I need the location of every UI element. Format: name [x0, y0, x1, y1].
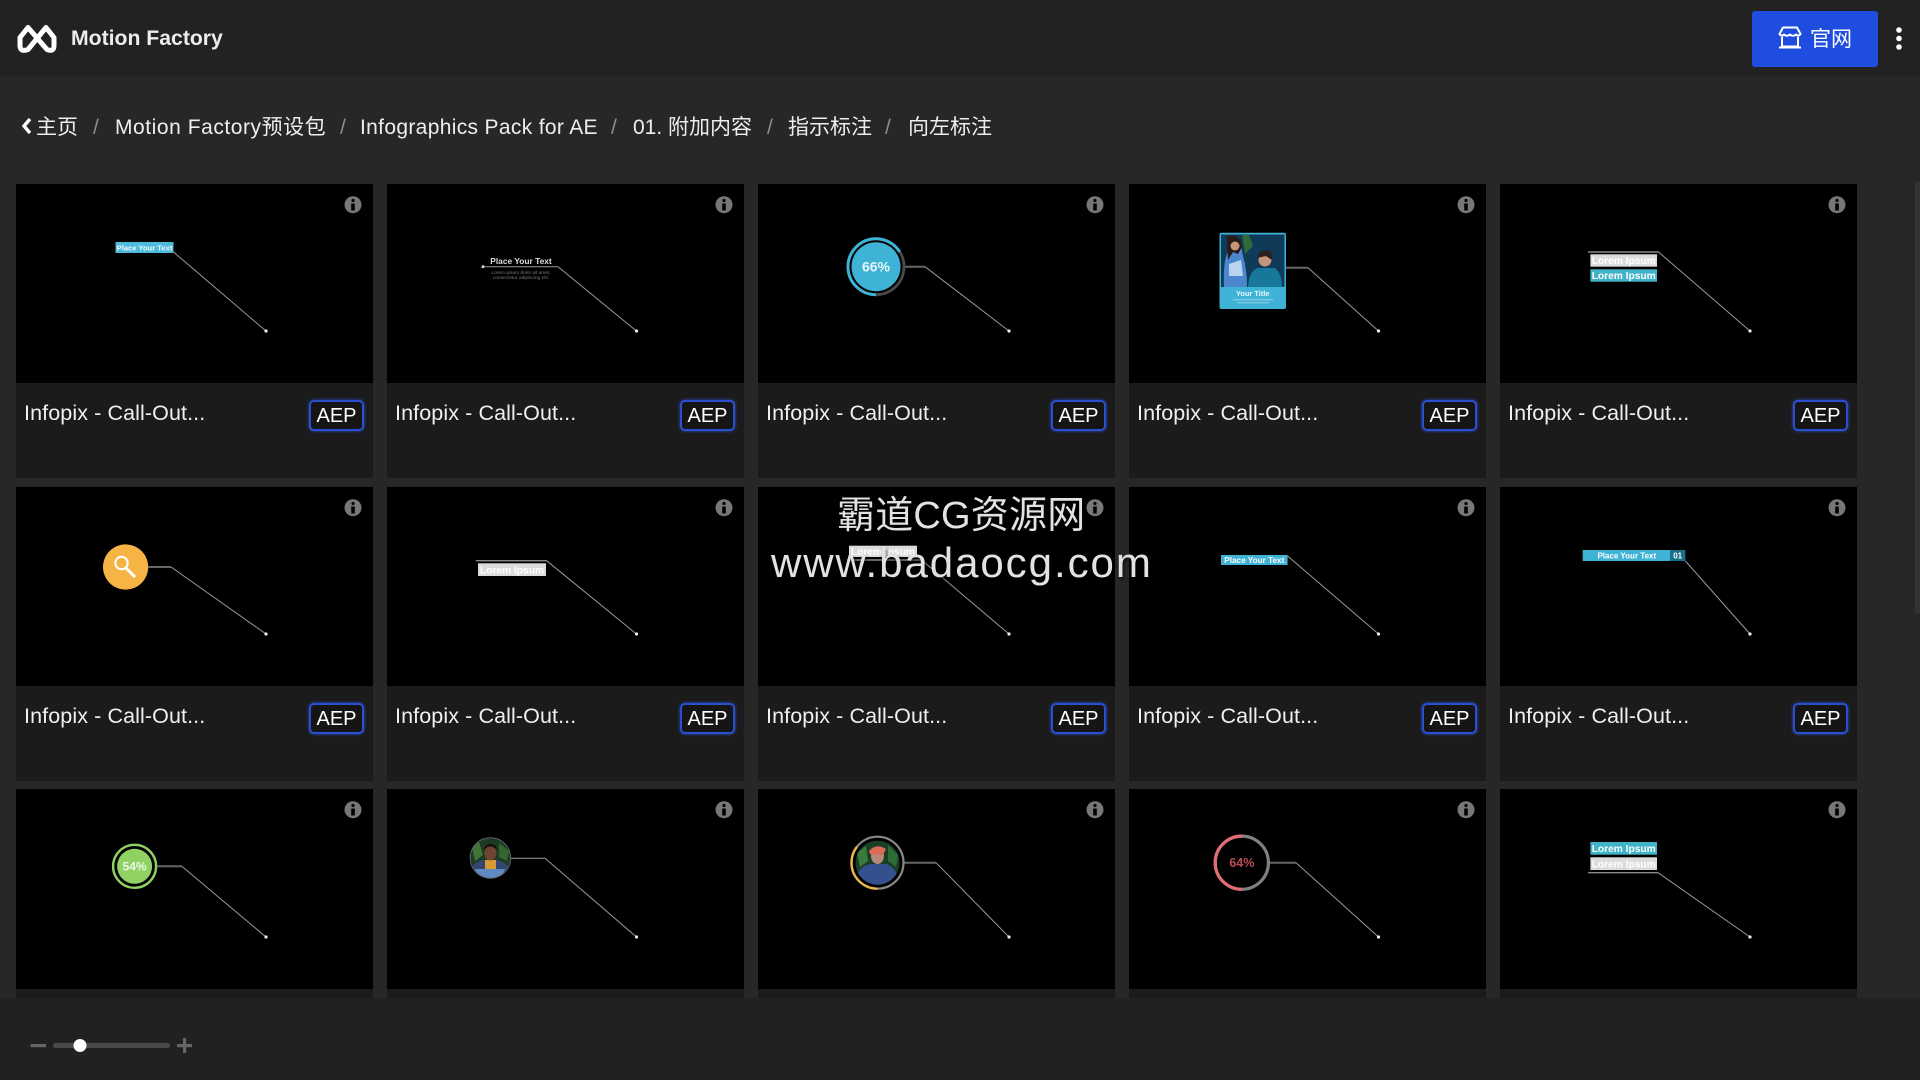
badge: AEP: AEP: [687, 708, 728, 730]
badge: AEP: [1422, 703, 1477, 734]
card title: Infopix - Call-Out...: [1508, 401, 1689, 425]
badge: AEP: [680, 703, 735, 734]
thumbnail: two stacked labels: [1500, 184, 1857, 383]
thumbnail: blue label with number tab: Place Your Text: [1597, 552, 1656, 560]
badge: AEP: AEP: [1058, 405, 1099, 427]
thumbnail: grey label with top rule: [387, 487, 744, 686]
badge: AEP: [680, 400, 735, 431]
card 6: search icon call-out: [16, 487, 373, 781]
brand name: Motion Factory: [71, 27, 223, 50]
breadcrumb navigation: 主页: [36, 116, 78, 139]
breadcrumb navigation: Motion Factory预设包: [115, 116, 326, 139]
thumbnail: blue text label: Place Your Text: [1224, 556, 1285, 565]
badge: AEP: AEP: [1429, 405, 1470, 427]
icon: Motion Factory logo: [18, 25, 56, 53]
breadcrumb navigation: [22, 116, 992, 139]
card title: Infopix - Call-Out...: [395, 704, 576, 728]
thumbnail: photo with title: Your Title: [1236, 289, 1269, 298]
thumbnail: blue text label: [1129, 487, 1486, 686]
vertical scrollbar thumb: [1915, 182, 1920, 613]
thumbnail: 66% ring: 66%: [862, 258, 891, 274]
badge: AEP: AEP: [316, 405, 357, 427]
thumbnail: stacked labels with bottom rule: Lorem Ipsum: [1592, 859, 1656, 870]
thumbnail: headline with underline call-out: Lorem ipsum dolor sit amet,: [491, 270, 551, 276]
badge: AEP: AEP: [316, 708, 357, 730]
thumbnail: headline with underline call-out: consectetur adipiscing elit.: [493, 275, 549, 281]
badge: AEP: [309, 400, 364, 431]
card title: Infopix - Call-Out...: [1137, 704, 1318, 728]
card 10: numbered label call-out: [1500, 487, 1857, 781]
icon: more menu: [1896, 27, 1902, 50]
card title: Infopix - Call-Out...: [24, 704, 205, 728]
badge: AEP: AEP: [1800, 405, 1841, 427]
badge: AEP: AEP: [1058, 708, 1099, 730]
card title: Infopix - Call-Out...: [395, 401, 576, 425]
thumbnail: headline with underline call-out: [387, 184, 744, 383]
zoom slider: [30, 1038, 192, 1053]
breadcrumb navigation: 向左标注: [908, 116, 992, 139]
thumbnail: blue label call-out: Place Your Text: [117, 243, 173, 252]
card title: Infopix - Call-Out...: [1508, 704, 1689, 728]
breadcrumb navigation: /: [340, 116, 346, 139]
thumbnail: avatar with ring: [758, 789, 1115, 989]
card title: Infopix - Call-Out...: [766, 401, 947, 425]
card 4: photo card call-out: [1129, 184, 1486, 478]
button label: 官网: [1810, 28, 1852, 51]
badge: AEP: AEP: [1429, 708, 1470, 730]
icon: store: [1778, 26, 1802, 48]
thumbnail: blue label with number tab: 01: [1673, 552, 1683, 560]
top navigation bar: [0, 0, 1920, 76]
card 9: blue label call-out: [1129, 487, 1486, 781]
thumbnail: 66% ring: [758, 184, 1115, 383]
thumbnail: 64% red ring: 64%: [1229, 856, 1254, 870]
badge: AEP: AEP: [687, 405, 728, 427]
thumbnail: 64% red ring: [1129, 789, 1486, 989]
breadcrumb navigation: 01. 附加内容: [633, 116, 752, 139]
card 11: green percent call-out: [16, 789, 373, 998]
thumbnail: 54% green ring: [16, 789, 373, 989]
card 7: single grey label call-out: [387, 487, 744, 781]
bottom toolbar: [0, 998, 1920, 1080]
card title: Infopix - Call-Out...: [24, 401, 205, 425]
badge: AEP: [1051, 400, 1106, 431]
thumbnail: grey label with top rule: Lorem Ipsum: [480, 565, 544, 576]
thumbnail: avatar portrait: [387, 789, 744, 989]
thumbnail: two stacked labels: Lorem Ipsum: [1592, 271, 1656, 282]
card 5: double label call-out: [1500, 184, 1857, 478]
thumbnail: two stacked labels: Lorem Ipsum: [1592, 256, 1656, 267]
thumbnail: stacked labels with bottom rule: Lorem Ipsum: [1592, 844, 1656, 855]
badge: AEP: [309, 703, 364, 734]
watermark: URL: www.badaocg.com: [771, 539, 1153, 586]
thumbnail: blue label with number tab: [1500, 487, 1857, 686]
card 12: avatar call-out: [387, 789, 744, 998]
card 8: grey label with underline call-out: [758, 487, 1115, 781]
thumbnail: stacked labels with bottom rule: [1500, 789, 1857, 989]
card 2: heading and text call-out: [387, 184, 744, 478]
badge: AEP: [1051, 703, 1106, 734]
card 15: double label underline call-out: [1500, 789, 1857, 998]
thumbnail: blue label call-out: [16, 184, 373, 383]
thumbnail: photo with title: [1129, 184, 1486, 383]
badge: AEP: [1422, 400, 1477, 431]
breadcrumb navigation: /: [885, 116, 891, 139]
card 13: avatar with progress ring call-out: [758, 789, 1115, 998]
breadcrumb navigation: /: [93, 116, 99, 139]
card 1: text label call-out: [16, 184, 373, 478]
breadcrumb navigation: 指示标注: [788, 116, 872, 139]
breadcrumb navigation: Infographics Pack for AE: [360, 116, 598, 139]
watermark: Chinese site name: 霸道CG资源网: [837, 495, 1085, 537]
thumbnail: yellow magnifier circle: [16, 487, 373, 686]
breadcrumb navigation: /: [611, 116, 617, 139]
badge: AEP: [1793, 400, 1848, 431]
card title: Infopix - Call-Out...: [766, 704, 947, 728]
icon: back chevron: [22, 118, 32, 134]
card 3: percent ring call-out: [758, 184, 1115, 478]
breadcrumb navigation: /: [767, 116, 773, 139]
badge: AEP: [1793, 703, 1848, 734]
card 14: red percent ring call-out: [1129, 789, 1486, 998]
badge: AEP: AEP: [1800, 708, 1841, 730]
button: official website: [1752, 11, 1878, 67]
card title: Infopix - Call-Out...: [1137, 401, 1318, 425]
thumbnail: grey label with bottom rule: [758, 487, 1115, 686]
thumbnail: headline with underline call-out: Place Your Text: [490, 256, 552, 266]
thumbnail: 54% green ring: 54%: [123, 860, 147, 874]
thumbnail: grey label with bottom rule: Lorem Ipsum: [851, 547, 915, 558]
